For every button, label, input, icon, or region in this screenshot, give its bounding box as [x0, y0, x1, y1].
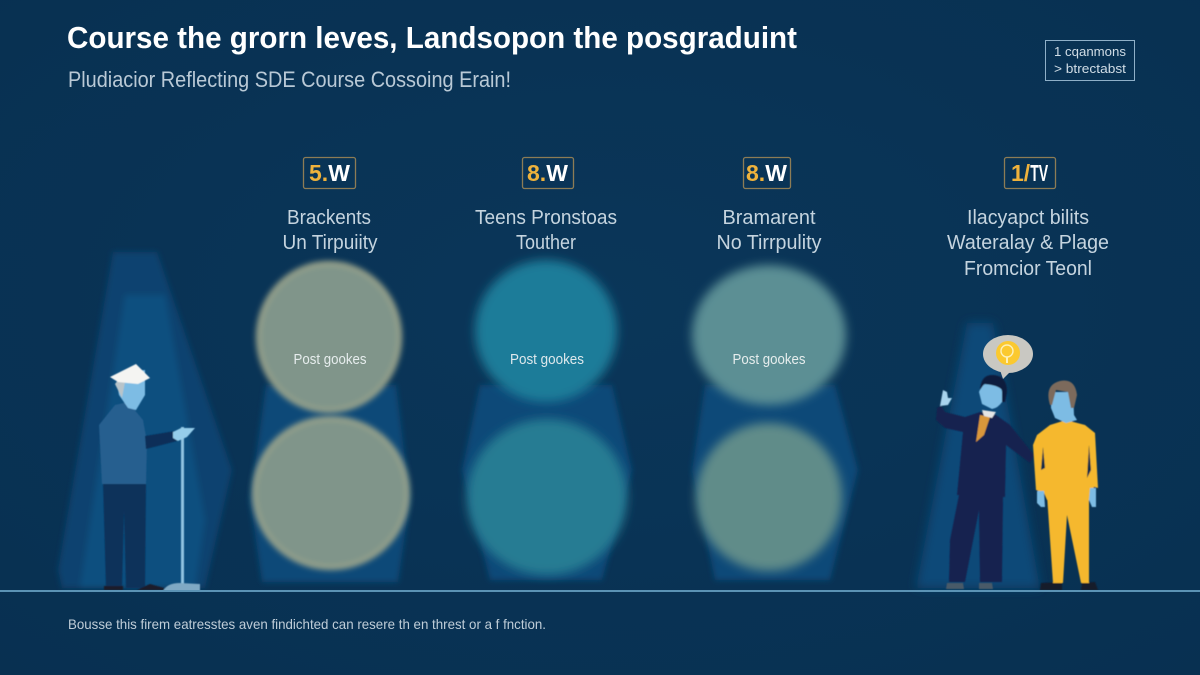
stat column 3 [716, 158, 822, 254]
figure: man in suit [936, 375, 1034, 589]
blob: column 2 bottom [467, 419, 627, 575]
stat column 1 [282, 158, 378, 254]
legend box: 1 cqanmons [1054, 45, 1126, 59]
column 2 label: Teens Pronstoas [475, 207, 617, 229]
stat column 2 [475, 158, 617, 254]
spotlight: left figure [58, 252, 232, 588]
blob: column 1 bottom [254, 418, 408, 568]
stat badge 3: 8.W [746, 160, 787, 186]
column 3 label: No Tirrpulity [716, 232, 822, 254]
stat badge 2 [522, 158, 574, 188]
blob: column 1 top [258, 263, 400, 411]
ground line [0, 590, 1200, 592]
column 1 label: Brackents [287, 207, 371, 229]
column 1 label: Un Tirpuiity [282, 232, 378, 254]
subtitle: Pludiacior Reflecting SDE Course Cossoing Erain! [68, 67, 511, 92]
spotlight: column 3 [692, 385, 858, 580]
stat column 4 [947, 158, 1109, 280]
stat badge 2: 8.W [527, 160, 568, 186]
column 4 label: Ilacyapct bilits [967, 207, 1089, 229]
blob: column 3 bottom [696, 423, 842, 571]
column 4 label: Fromcior Teonl [964, 258, 1092, 280]
blob: column 3 top [692, 265, 846, 405]
blob: column 2 top [475, 260, 617, 402]
blob label 2: Post gookes [510, 352, 584, 368]
spotlight: right figures [916, 323, 1040, 588]
column 3 label: Bramarent [722, 207, 816, 229]
footnote: Bousse this firem eatresstes aven findichted can resere th en threst or a f fnction. [68, 616, 546, 632]
column 2 label: Touther [516, 232, 576, 254]
column 4 label: Wateralay & Plage [947, 232, 1109, 254]
figure: graduate with cane [99, 364, 200, 591]
legend box [1046, 40, 1134, 80]
stat badge 4 [1004, 158, 1056, 188]
stat badge 1: 5.W [309, 160, 350, 186]
stat badge 4: 1/TV [1011, 160, 1049, 186]
blob label 1: Post gookes [294, 352, 366, 368]
blob label 3: Post gookes [732, 352, 806, 368]
speech bubble with lightbulb [983, 335, 1033, 379]
title: Course the grorn leves, Landsopon the posgraduint [67, 20, 797, 55]
spotlight: column 1 [250, 385, 410, 582]
spotlight: column 2 [462, 385, 632, 580]
legend box: > btrectabst [1054, 62, 1127, 76]
figure: person in yellow [1033, 381, 1098, 590]
